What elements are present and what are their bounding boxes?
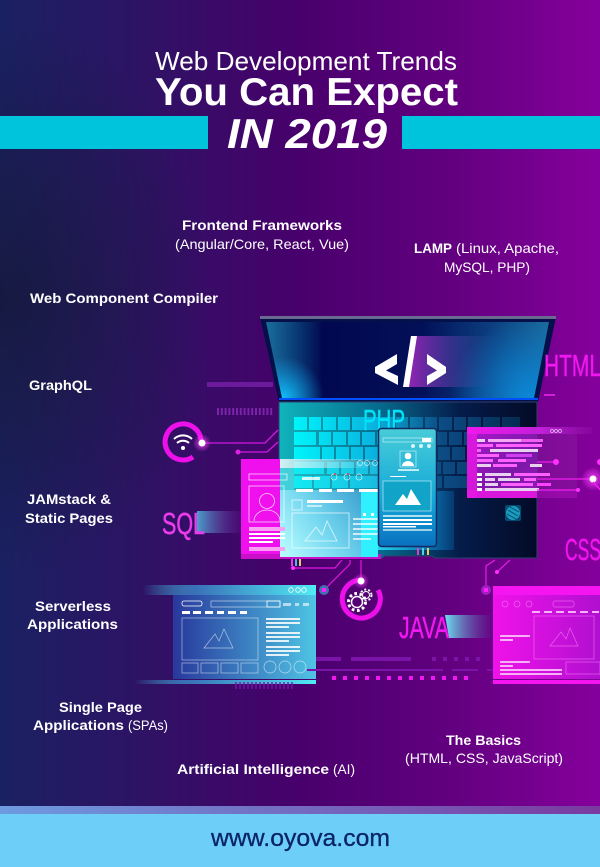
footer [0,806,600,867]
trackpad [361,491,454,550]
text: The Basics: (HTML, CSS, JavaScript) [405,750,563,766]
text: Single Page Applications: Applications [33,717,124,733]
profile card text bars [249,477,378,551]
text: JAMstack & Static Pages [25,491,113,526]
text: Artificial Intelligence: (AI) [333,761,355,777]
decorative circuit lines left of the laptop [202,382,555,454]
text: Single Page Applications [33,699,168,733]
laptop screen [266,322,549,400]
label: PHP: PHP [363,405,405,437]
title: Web Development Trends [155,46,457,76]
phone image card [383,481,431,511]
text: LAMP: MySQL, PHP) [444,259,530,275]
keyboard [294,417,520,488]
laptop base [279,402,537,558]
label: SQL with fade bar: SQL [162,506,205,541]
phone avatar [398,451,419,471]
floating panel: profile card [241,459,381,559]
footer url: www.oyova.com [210,825,390,852]
code symbol [375,336,446,387]
magenta side [241,459,280,559]
title: You Can Expect [155,71,458,114]
floating panel: blue wireframe [135,585,316,684]
profile card outlines [249,474,349,548]
title [0,46,600,157]
circuit connectors on the right [486,459,600,590]
decorative dashes and dots [235,657,573,686]
title: IN 2019 [227,110,388,157]
label: JAVA with fade bar: JAVA [399,610,449,645]
text: JAMstack & Static Pages: JAMstack & [27,491,111,507]
rainbow marks below phone [417,548,429,555]
text: The Basics [405,732,563,766]
text: Web Component Compiler: Web Component Compiler [30,290,219,306]
teal bar: right [402,116,600,149]
text: Frontend Frameworks: (Angular/Core, React, Vue) [175,236,349,252]
text: LAMP [414,240,559,275]
laptop [260,316,556,558]
text: Serverless Applications: Applications [27,616,118,632]
fingerprint sensor [505,505,521,521]
text: JAMstack & Static Pages: Static Pages [25,510,113,526]
text: Single Page Applications: Single Page [59,699,142,715]
text: Frontend Frameworks [175,217,349,252]
floating panel: code editor [467,427,592,498]
text: Artificial Intelligence: Artificial Intelligence [177,761,329,777]
laptop lid [260,317,556,402]
phone [378,428,436,546]
glass side [280,490,378,557]
teal bar: left [0,116,208,149]
text: GraphQL: GraphQL [29,377,92,393]
text: Serverless Applications: Serverless [35,598,111,614]
text: Serverless Applications [27,598,118,632]
lower left circuit connectors [291,559,361,595]
floating panel: pink wireframe [481,585,600,684]
icon: wifi [165,424,211,460]
text: Frontend Frameworks: Frontend Frameworks [182,217,342,233]
text: LAMP: LAMP [414,240,452,256]
text: The Basics: The Basics [446,732,521,748]
text: LAMP: (Linux, Apache, [456,240,559,256]
icon: gears [342,573,380,618]
text: Single Page Applications: (SPAs) [128,717,168,733]
